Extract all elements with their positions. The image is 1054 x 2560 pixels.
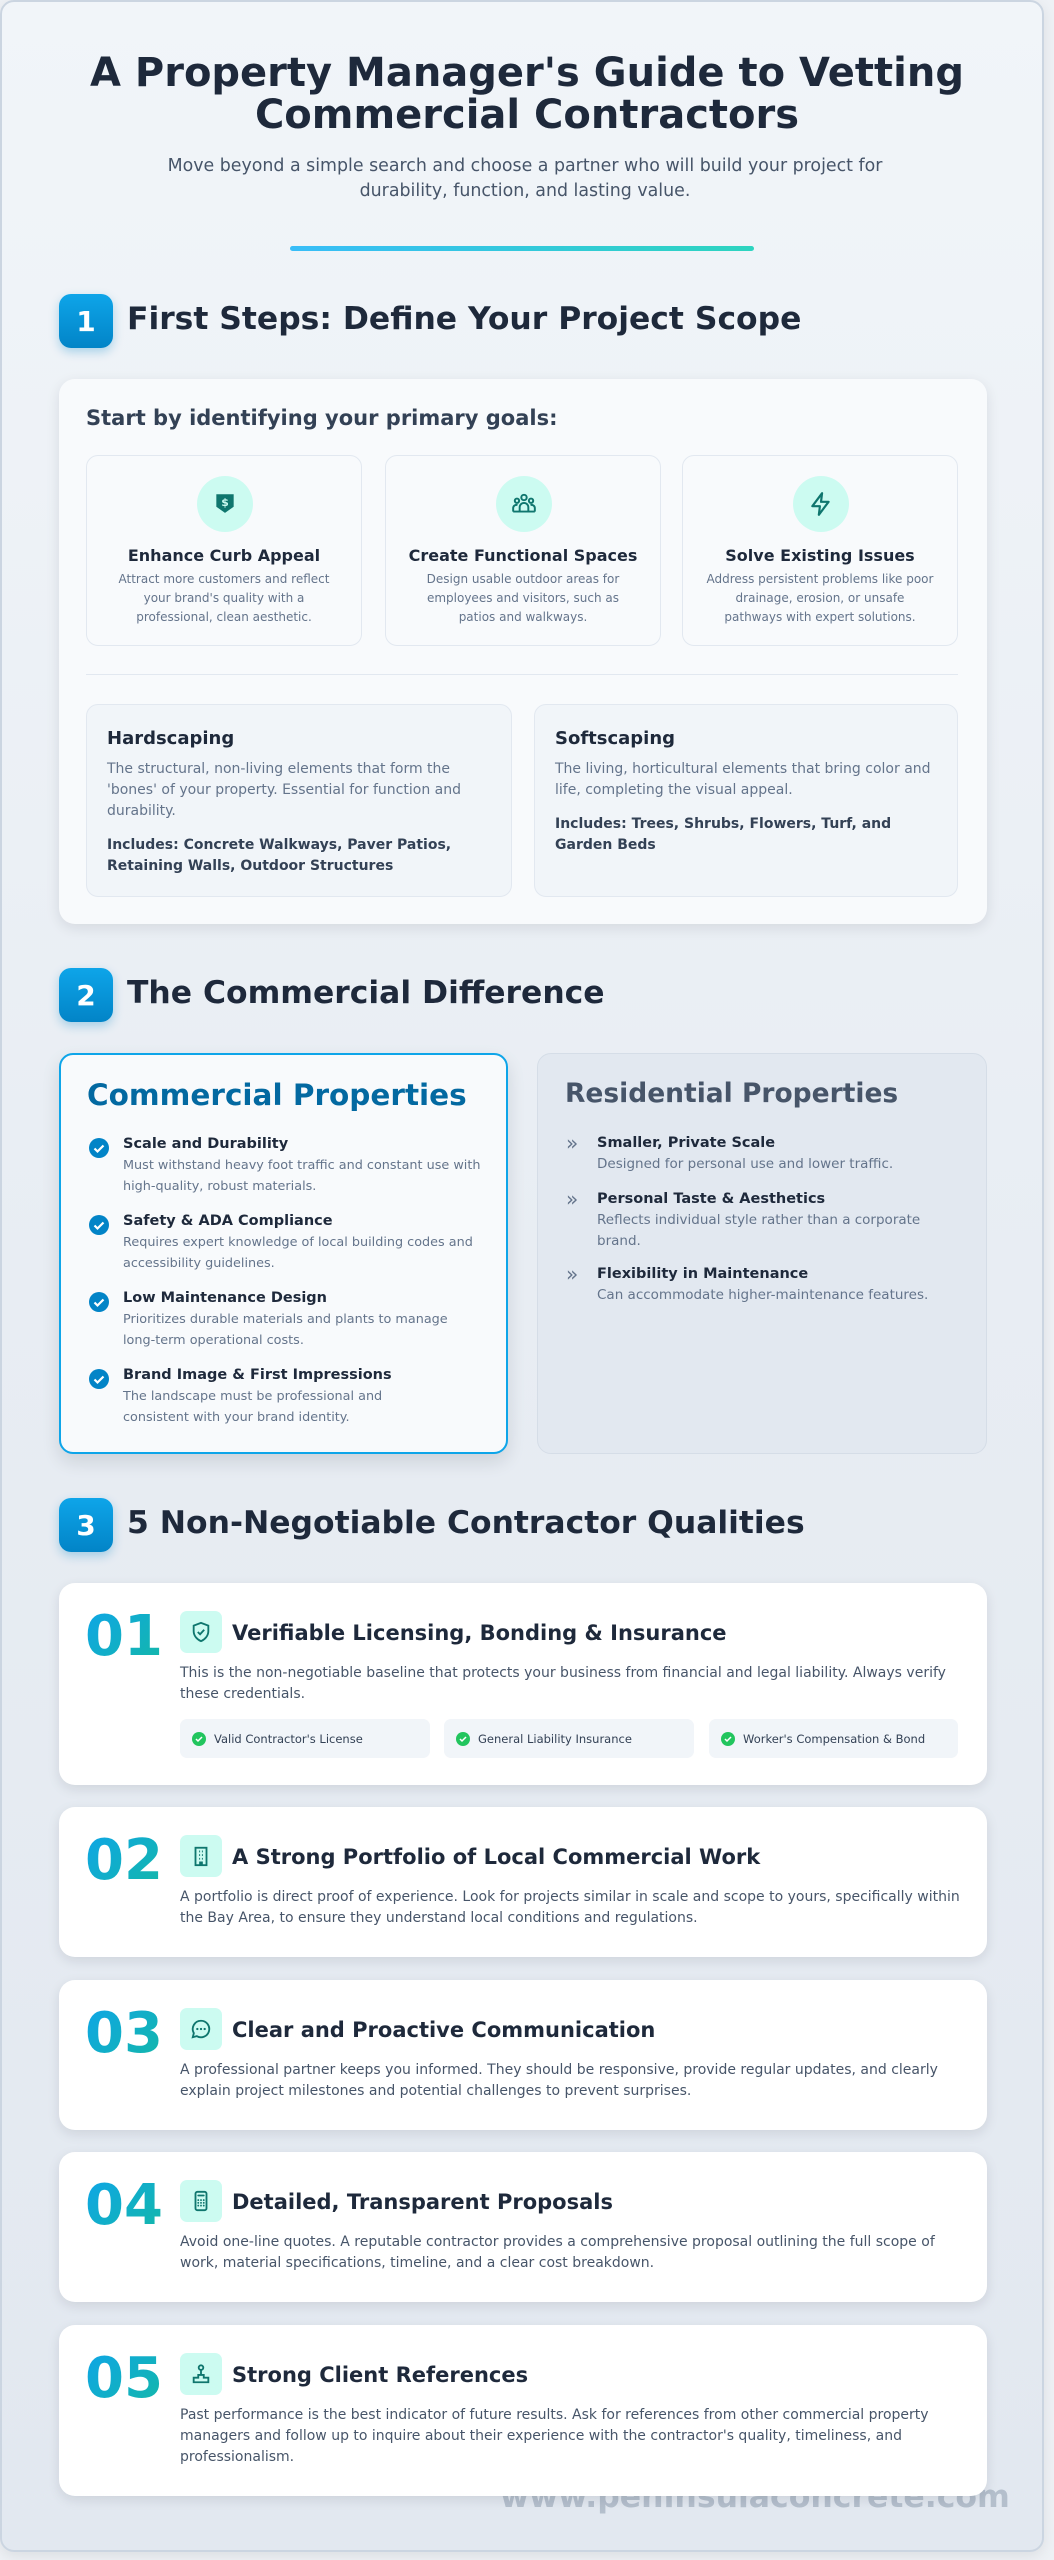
commercial item list: Scale and Durability <box>123 1136 288 1152</box>
goal card: functional spaces: Create Functional Spaces <box>409 546 637 565</box>
goal card: solve issues: Address persistent problems like poor drainage, erosion, or unsafe pathways with expert solutions. <box>707 572 933 624</box>
residential item list <box>566 1131 928 1303</box>
icon: storefront: $ <box>221 496 229 509</box>
softscaping box: Includes: Trees, Shrubs, Flowers, Turf, and Garden Beds <box>555 816 891 853</box>
commercial item list: Safety & ADA Compliance <box>123 1213 333 1229</box>
quality card 02: 02 <box>85 1828 163 1893</box>
panel subheading: Start by identifying your primary goals: <box>86 406 558 430</box>
goal card: functional spaces <box>385 455 661 646</box>
title <box>90 50 964 138</box>
icon: lightning <box>793 476 849 532</box>
hardscaping box <box>86 704 512 897</box>
section 1 header: First Steps: Define Your Project Scope <box>127 301 801 337</box>
title: Commercial Contractors <box>255 92 799 138</box>
commercial item list: Low Maintenance Design <box>123 1290 327 1306</box>
commercial item list: The landscape must be professional and consistent with your brand identity. <box>123 1389 382 1425</box>
residential item list: Designed for personal use and lower traffic. <box>597 1156 893 1172</box>
icon: building <box>180 1835 222 1877</box>
quality card 01: This is the non-negotiable baseline that protects your business from financial and legal liability. Always verify these credentials. <box>180 1665 946 1702</box>
hardscaping box: The structural, non-living elements that form the 'bones' of your property. Essential for function and durability. <box>107 761 461 819</box>
commercial item list: Must withstand heavy foot traffic and constant use with high-quality, robust materials. <box>123 1158 480 1194</box>
residential item list: Smaller, Private Scale <box>597 1135 775 1151</box>
quality card 03: Clear and Proactive Communication <box>232 2018 655 2042</box>
goal card: curb appeal: Attract more customers and reflect your brand's quality with a professional, clean aesthetic. <box>118 572 329 624</box>
quality card 02 <box>59 1807 987 1957</box>
icon: storefront <box>197 476 253 532</box>
credential chips <box>180 1719 430 1758</box>
quality card 03 <box>59 1980 987 2130</box>
quality card 03: 03 <box>85 2001 163 2066</box>
quality card 02: A portfolio is direct proof of experience. Look for projects similar in scale and scope to yours, specifically within the Bay Area, to ensure they understand local conditions and regulations. <box>180 1889 960 1926</box>
commercial item list: Requires expert knowledge of local building codes and accessibility guidelines. <box>123 1235 473 1271</box>
commercial item list <box>89 1136 480 1425</box>
hardscaping box: Hardscaping <box>107 728 234 749</box>
quality card 04 <box>59 2152 987 2302</box>
residential item list: » <box>566 1262 578 1286</box>
quality card 03: A professional partner keeps you informed. They should be responsive, provide regular updates, and clearly explain project milestones and potential challenges to prevent surprises. <box>180 2062 938 2099</box>
icon: chat bubble <box>180 2008 222 2050</box>
quality card 05: Past performance is the best indicator of future results. Ask for references from other commercial property managers and follow up to inquire about their experience with the contractor's quality, timeliness, and professionalism. <box>180 2407 929 2465</box>
gradient accent bar <box>290 246 754 251</box>
goal card: solve issues: Solve Existing Issues <box>725 546 915 565</box>
quality card 01 <box>59 1583 987 1785</box>
section 1 header: 1 <box>76 304 96 338</box>
goal card: curb appeal <box>86 455 362 646</box>
section 2 header <box>53 966 605 1032</box>
section 2 header: 2 <box>76 978 96 1012</box>
residential item list: Flexibility in Maintenance <box>597 1266 808 1282</box>
residential item list: Reflects individual style rather than a corporate brand. <box>597 1212 920 1249</box>
residential item list: Can accommodate higher-maintenance features. <box>597 1287 928 1303</box>
title: A Property Manager's Guide to Vetting <box>90 50 964 96</box>
softscaping box: The living, horticultural elements that bring color and life, completing the visual appeal. <box>555 761 931 798</box>
icon: shield <box>180 1611 222 1653</box>
goal card: functional spaces: Design usable outdoor areas for employees and visitors, such as patios and walkways. <box>427 572 619 624</box>
section 1 header <box>53 292 801 358</box>
panel: residential properties <box>537 1053 987 1454</box>
quality card 02: A Strong Portfolio of Local Commercial Work <box>232 1845 760 1869</box>
section 2 header: The Commercial Difference <box>127 975 605 1011</box>
commercial item list: Prioritizes durable materials and plants to manage long-term operational costs. <box>123 1312 448 1348</box>
hardscaping box: Includes: Concrete Walkways, Paver Patios, Retaining Walls, Outdoor Structures <box>107 837 451 874</box>
commercial heading: Commercial Properties <box>87 1078 467 1112</box>
goal card: solve issues <box>682 455 958 646</box>
softscaping box: Softscaping <box>555 728 675 749</box>
quality card 01: General Liability Insurance <box>478 1732 632 1746</box>
residential item list: » <box>566 1187 578 1211</box>
residential item list: Personal Taste & Aesthetics <box>597 1191 825 1207</box>
credential chips: Valid Contractor's License <box>214 1732 363 1746</box>
watermark: www.peninsulaconcrete.com <box>500 2479 1010 2515</box>
icon: people <box>496 476 552 532</box>
section 3 header: 3 <box>76 1508 96 1542</box>
subtitle: Move beyond a simple search and choose a partner who will build your project for durability, function, and lasting value. <box>168 156 882 201</box>
panel: project scope <box>59 379 987 924</box>
goal card: curb appeal: Enhance Curb Appeal <box>128 546 320 565</box>
quality card 04: Avoid one-line quotes. A reputable contractor provides a comprehensive proposal outlining the full scope of work, material specifications, timeline, and a clear cost breakdown. <box>180 2234 935 2271</box>
quality card 05: 05 <box>85 2346 163 2411</box>
quality card 05: Strong Client References <box>232 2363 528 2387</box>
quality card 01: Verifiable Licensing, Bonding & Insurance <box>232 1621 727 1645</box>
residential heading: Residential Properties <box>565 1078 898 1109</box>
commercial item list: Brand Image & First Impressions <box>123 1367 392 1383</box>
softscaping box <box>534 704 958 897</box>
quality card 05 <box>59 2325 987 2496</box>
residential item list: » <box>566 1131 578 1155</box>
section 3 header <box>53 1496 805 1562</box>
icon: calculator <box>180 2180 222 2222</box>
quality card 04: Detailed, Transparent Proposals <box>232 2190 613 2214</box>
quality card 01: Worker's Compensation & Bond <box>743 1732 925 1746</box>
section 3 header: 5 Non-Negotiable Contractor Qualities <box>127 1505 805 1541</box>
quality card 01: 01 <box>85 1604 163 1669</box>
panel: commercial properties <box>59 1053 508 1454</box>
icon: person on podium <box>180 2353 222 2395</box>
quality card 04: 04 <box>85 2173 163 2238</box>
